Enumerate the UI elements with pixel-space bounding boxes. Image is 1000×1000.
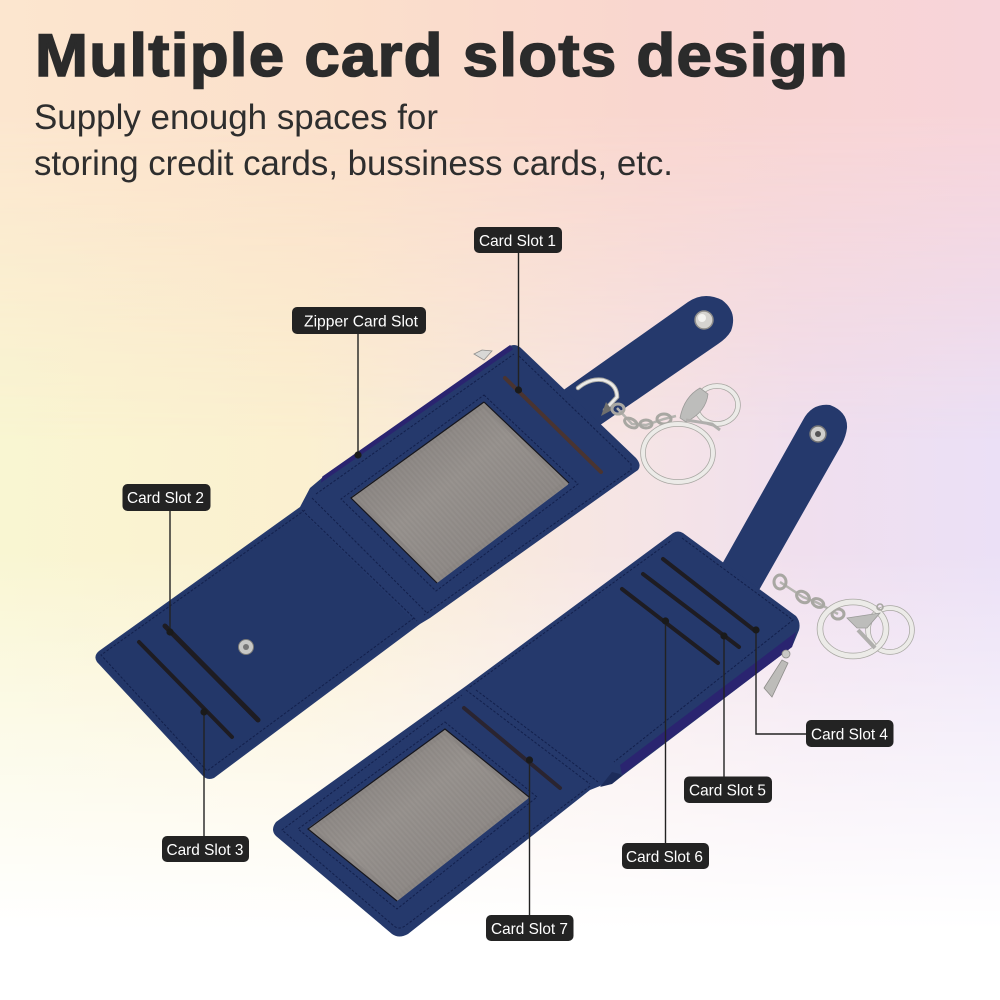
ID window xyxy=(298,722,537,909)
stitching lines xyxy=(101,354,631,771)
callout: Card Slot 2 xyxy=(122,484,210,636)
callout: Card Slot 4 xyxy=(752,626,894,747)
slot 2 xyxy=(165,626,258,720)
wallet: open front view with four slots xyxy=(273,405,912,937)
strap with snap xyxy=(555,296,733,432)
callout: Card Slot 7 xyxy=(486,756,574,941)
title: Multiple card slots design xyxy=(35,22,849,89)
slot 3 xyxy=(139,642,232,737)
snap button xyxy=(238,640,254,654)
wallet body xyxy=(273,532,800,936)
callout: Card Slot 3: Card Slot 3 xyxy=(166,842,244,859)
keychain xyxy=(578,380,738,482)
zipper end tab xyxy=(600,772,622,787)
wallet body xyxy=(95,345,640,779)
zipper strip xyxy=(620,632,796,775)
callout: Card Slot 5 xyxy=(684,632,772,803)
zipper strip xyxy=(322,346,512,481)
slot 5 xyxy=(643,574,739,647)
callout: Card Slot 1 xyxy=(474,227,562,394)
slot 1 xyxy=(505,378,601,472)
callout: Card Slot 6 xyxy=(622,617,709,869)
keychain xyxy=(774,575,912,656)
subtitle xyxy=(34,98,673,183)
callout: Card Slot 3 xyxy=(162,708,249,862)
zipper pull xyxy=(764,650,790,697)
callout: Card Slot 1: Card Slot 1 xyxy=(479,233,556,250)
callout: Zipper Card Slot xyxy=(292,307,426,459)
stitching lines xyxy=(282,538,793,928)
strap with snap xyxy=(712,405,847,606)
slot 4 xyxy=(663,559,754,630)
fold panel shade xyxy=(97,510,416,778)
subtitle: storing credit cards, bussiness cards, etc. xyxy=(34,144,673,183)
ID window xyxy=(341,395,578,591)
callout: Card Slot 7: Card Slot 7 xyxy=(491,921,568,938)
subtitle: Supply enough spaces for xyxy=(34,98,438,137)
callout: Card Slot 6: Card Slot 6 xyxy=(626,849,703,866)
callout: Card Slot 2: Card Slot 2 xyxy=(127,490,204,507)
callout: Card Slot 4: Card Slot 4 xyxy=(811,726,888,744)
slot 6 xyxy=(622,589,718,663)
slot 7 xyxy=(464,708,560,788)
zipper pull xyxy=(474,350,492,360)
wallet: open back view with ID window xyxy=(95,296,738,779)
callout: Zipper Card Slot: Zipper Card Slot xyxy=(304,314,419,330)
callout: Card Slot 5: Card Slot 5 xyxy=(689,782,766,800)
